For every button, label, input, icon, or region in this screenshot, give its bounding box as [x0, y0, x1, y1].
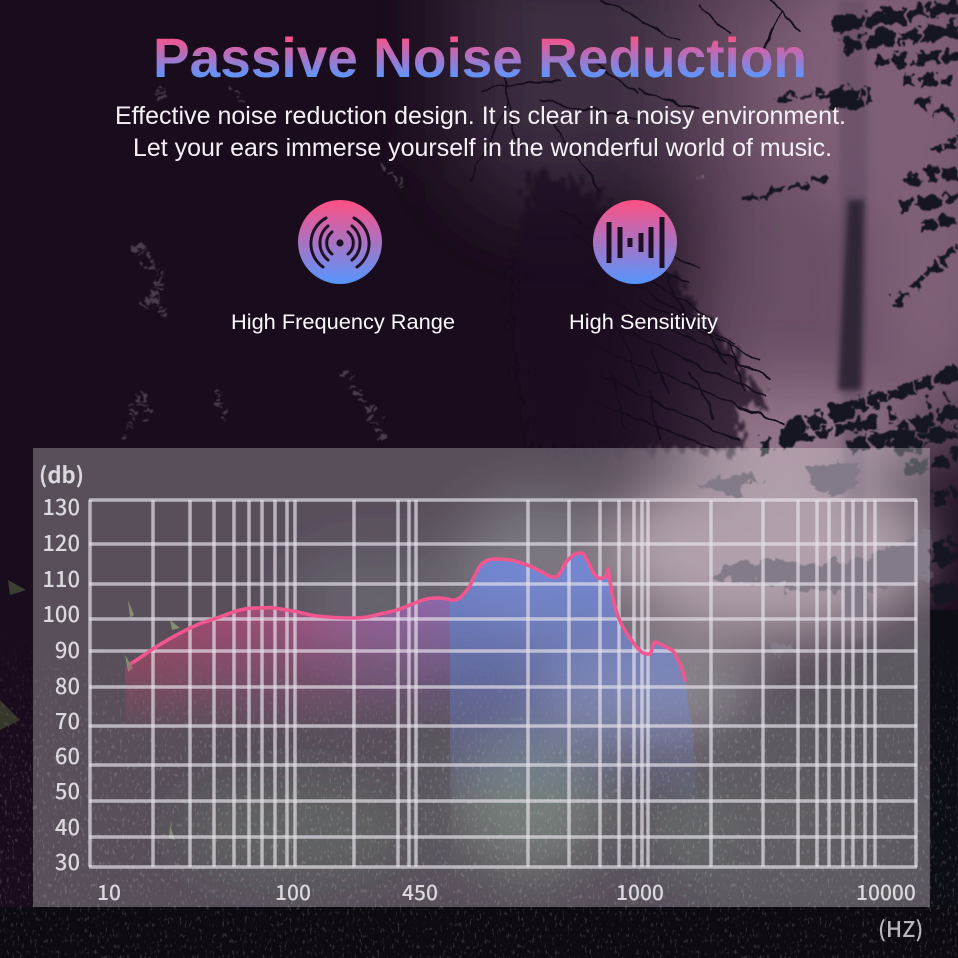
central conifer silhouette	[510, 170, 770, 450]
y axis labels: 40	[55, 810, 80, 842]
green foliage specks	[0, 580, 180, 840]
y axis labels: 30	[55, 845, 80, 877]
x axis labels: 10	[97, 877, 121, 907]
feature labels: High Sensitivity	[569, 310, 718, 334]
frequency response curve	[132, 553, 685, 680]
y axis labels: 110	[42, 562, 80, 594]
x axis labels: 100	[275, 877, 311, 907]
x axis labels: 10000	[856, 877, 916, 907]
x axis unit: (HZ)	[878, 912, 923, 944]
chart panel	[33, 448, 930, 907]
description text: Effective noise reduction design. It is clear in a noisy environment.	[115, 102, 846, 130]
icon: high frequency range	[298, 200, 382, 284]
y axis labels: 60	[55, 739, 80, 771]
chart area fill	[125, 554, 697, 790]
y axis unit: (db)	[39, 458, 84, 490]
y axis labels: 90	[55, 633, 80, 665]
y axis labels: 50	[55, 774, 80, 806]
light speckles	[125, 85, 708, 440]
right foliage clusters	[742, 8, 958, 595]
right distant trunk and lower silhouettes	[838, 0, 868, 640]
y axis labels: 120	[42, 526, 80, 558]
forest floor speckle	[33, 560, 930, 907]
icon: high sensitivity	[593, 200, 677, 284]
feature labels: High Frequency Range	[231, 310, 455, 334]
y axis labels: 70	[55, 704, 80, 736]
central conifer branches	[470, 0, 800, 450]
x axis labels	[97, 877, 916, 907]
description text	[115, 102, 846, 162]
y axis labels	[42, 490, 80, 877]
frequency grid	[89, 500, 917, 867]
y axis labels: 100	[42, 597, 80, 629]
description text: Let your ears immerse yourself in the wonderful world of music.	[133, 134, 832, 162]
x axis labels: 450	[402, 877, 438, 907]
y axis labels: 80	[55, 669, 80, 701]
title: Passive Noise Reduction	[153, 26, 807, 89]
mottled branches seen through the panel	[695, 462, 930, 656]
x axis labels: 1000	[616, 877, 664, 907]
feature labels	[231, 310, 718, 334]
y axis labels: 130	[42, 490, 80, 522]
